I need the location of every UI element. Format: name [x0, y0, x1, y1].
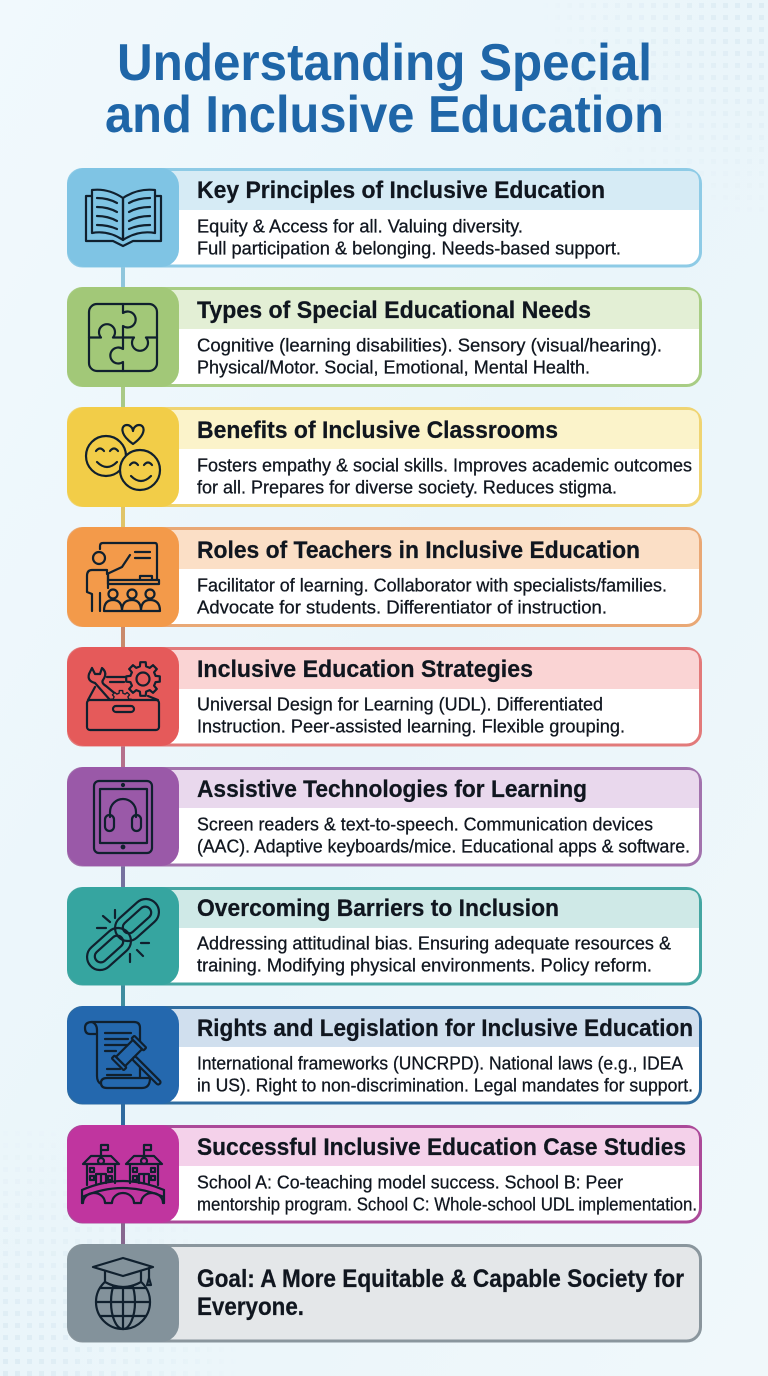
- timeline connectors: [121, 266, 125, 1245]
- icon: open book: [86, 190, 161, 246]
- panel: assistive technologies: (AAC). Adaptive keyboards/mice. Educational apps & software.: [197, 836, 690, 856]
- icon: smiling faces and heart: [86, 425, 160, 490]
- panel: goal: Goal: A More Equitable & Capable Society for: [197, 1265, 684, 1293]
- panel: rights and legislation: in US). Right to non-discrimination. Legal mandates for support.: [197, 1074, 693, 1096]
- panel: goal: Everyone.: [197, 1293, 304, 1321]
- panel: benefits: Fosters empathy & social skills. Improves academic outcomes: [197, 454, 692, 476]
- panel: rights and legislation: [67, 1006, 700, 1104]
- icon: teacher at board with students: [87, 543, 160, 611]
- panel: roles of teachers: [67, 527, 700, 627]
- panel: key principles: [67, 168, 700, 267]
- panel: case studies: School A: Co-teaching model success. School B: Peer: [197, 1172, 623, 1192]
- panel: roles of teachers: Advocate for students. Differentiator of instruction.: [197, 596, 607, 618]
- icon: scroll and gavel: [85, 1022, 171, 1095]
- panel: case studies: [67, 1125, 700, 1223]
- panel: roles of teachers: Roles of Teachers in Inclusive Education: [197, 537, 640, 564]
- panel: types of needs: Types of Special Educational Needs: [197, 297, 591, 324]
- panel: types of needs: [67, 287, 700, 387]
- panel: strategies: Universal Design for Learning (UDL). Differentiated: [197, 694, 603, 714]
- icon: tablet with headphones: [94, 781, 152, 853]
- panel: benefits: for all. Prepares for diverse society. Reduces stigma.: [197, 476, 617, 498]
- panel: strategies: Instruction. Peer-assisted learning. Flexible grouping.: [197, 716, 625, 736]
- panel: overcoming barriers: [67, 887, 700, 985]
- panel: case studies: Successful Inclusive Education Case Studies: [197, 1134, 686, 1161]
- panel: rights and legislation: International frameworks (UNCRPD). National laws (e.g., IDEA: [197, 1052, 684, 1074]
- panel: key principles: Equity & Access for all. Valuing diversity.: [197, 216, 523, 236]
- panel: assistive technologies: Screen readers & text-to-speech. Communication devices: [197, 814, 653, 834]
- title: [105, 34, 664, 144]
- panel: types of needs: Physical/Motor. Social, Emotional, Mental Health.: [197, 356, 590, 378]
- icon: puzzle: [89, 304, 157, 371]
- icon: two schools on a bridge: [82, 1145, 164, 1203]
- panel: key principles: Full participation & belonging. Needs-based support.: [197, 238, 621, 258]
- icon: graduation cap on globe: [93, 1258, 153, 1329]
- panel: roles of teachers: Facilitator of learning. Collaborator with specialists/families.: [197, 574, 667, 596]
- panel: benefits: Benefits of Inclusive Classrooms: [197, 417, 558, 444]
- title: Understanding Special: [117, 34, 652, 92]
- panel: types of needs: Cognitive (learning disabilities). Sensory (visual/hearing).: [197, 334, 662, 356]
- title: and Inclusive Education: [105, 86, 664, 144]
- panel: key principles: Key Principles of Inclusive Education: [197, 177, 605, 204]
- panel: strategies: Inclusive Education Strategies: [197, 656, 533, 683]
- panel: overcoming barriers: Addressing attitudinal bias. Ensuring adequate resources &: [197, 932, 672, 954]
- panel: case studies: mentorship program. School C: Whole-school UDL implementation.: [197, 1194, 697, 1214]
- panel: strategies: [67, 647, 700, 746]
- icon: toolbox with gears: [87, 662, 160, 730]
- panel: assistive technologies: Assistive Technologies for Learning: [197, 776, 587, 803]
- panel: overcoming barriers: Overcoming Barriers to Inclusion: [197, 895, 559, 922]
- panel: goal: [67, 1244, 700, 1342]
- panel: assistive technologies: [67, 767, 700, 866]
- panel: overcoming barriers: training. Modifying physical environments. Policy reform.: [197, 954, 652, 976]
- icon: broken chain: [82, 894, 164, 975]
- panel: rights and legislation: Rights and Legislation for Inclusive Education: [197, 1015, 693, 1042]
- panel: benefits: [67, 407, 700, 507]
